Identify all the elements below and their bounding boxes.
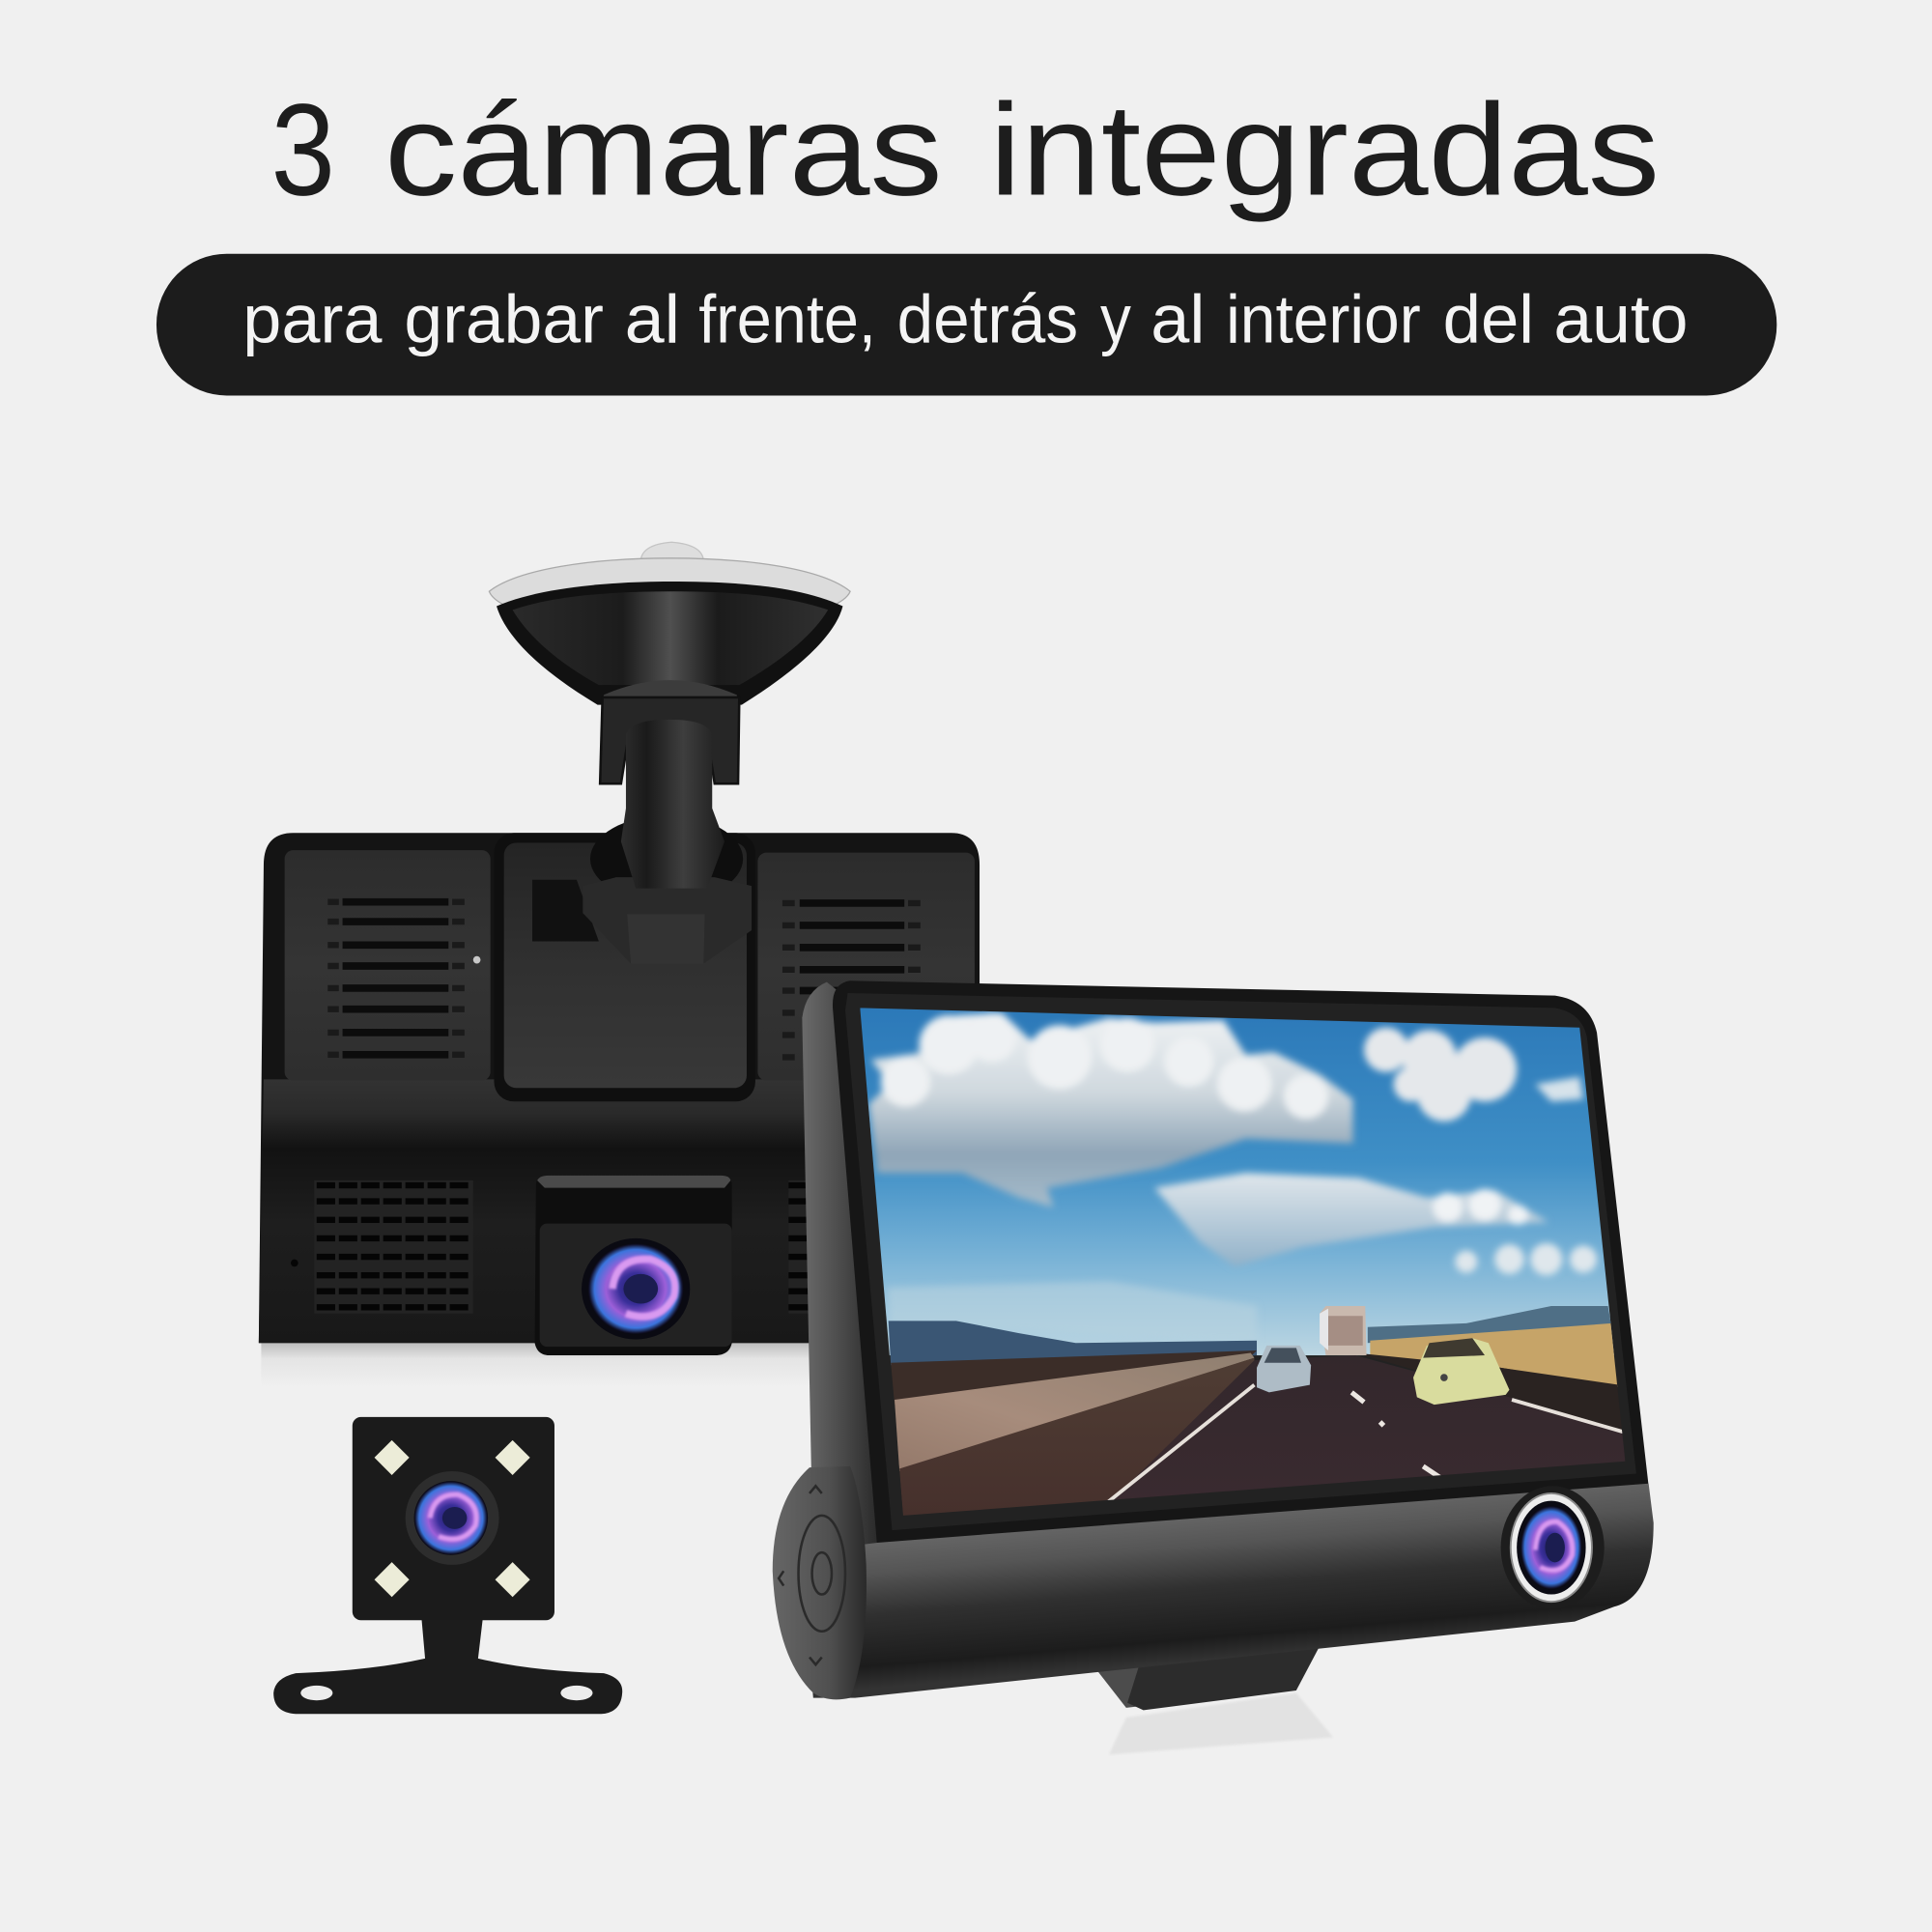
left back panel <box>285 850 491 1081</box>
subtitle text: para <box>242 281 383 357</box>
far left strip <box>891 1350 1257 1405</box>
lower back body <box>259 1079 980 1343</box>
screen <box>850 1005 1638 1518</box>
mount arm <box>621 720 724 889</box>
front lens <box>1501 1486 1605 1609</box>
subtitle text <box>242 281 1688 357</box>
centre mount plate <box>494 833 755 1101</box>
side clip <box>532 880 599 941</box>
title: integradas <box>989 77 1660 223</box>
rear view of dash camera with suction mount <box>259 542 980 1387</box>
subtitle text: auto <box>1553 281 1688 357</box>
suction cup <box>489 542 850 707</box>
subtitle text: al <box>625 281 680 357</box>
subtitle text: al <box>1151 281 1205 357</box>
subtitle text: interior <box>1226 281 1421 357</box>
indicator <box>473 956 480 963</box>
right back panel <box>757 853 975 1081</box>
lens <box>406 1471 499 1565</box>
monitor dash camera front view <box>773 980 1654 1754</box>
hex nut <box>582 877 752 963</box>
road <box>1104 1355 1627 1508</box>
lower grille left <box>314 1180 473 1314</box>
right mountains <box>1368 1306 1611 1343</box>
title: cámaras <box>384 77 943 223</box>
yellow car <box>1413 1338 1509 1405</box>
right road shoulder <box>1364 1354 1617 1387</box>
floor reflection <box>1109 1693 1333 1754</box>
subtitle text: frente, <box>698 281 876 357</box>
clouds <box>868 1012 1597 1343</box>
lower body bar <box>801 1484 1654 1698</box>
mount bracket <box>600 697 739 783</box>
truck <box>1320 1306 1367 1355</box>
lower grille right <box>788 1180 820 1314</box>
subtitle text: del <box>1443 281 1534 357</box>
left mountains <box>889 1321 1257 1365</box>
camera cube <box>353 1417 554 1620</box>
sky <box>850 1005 1638 1355</box>
road lines <box>1106 1385 1623 1503</box>
subtitle text: grabar <box>404 281 604 357</box>
LEDs <box>375 1440 530 1597</box>
left vents <box>327 902 465 1055</box>
title: 3 <box>271 77 335 223</box>
side button cap <box>773 1466 867 1699</box>
mounting plate <box>273 1616 622 1714</box>
title <box>271 77 1660 223</box>
desert right <box>1370 1323 1619 1387</box>
microphone <box>291 1260 298 1266</box>
floor reflection <box>261 1343 828 1387</box>
side strip <box>802 982 882 1565</box>
camera back housing <box>259 833 980 1343</box>
dark embankment <box>899 1358 1254 1518</box>
rear camera with LEDs <box>273 1417 622 1714</box>
silver car <box>1257 1346 1311 1392</box>
side buttons <box>779 1486 845 1664</box>
subtitle text: y <box>1100 281 1131 357</box>
front lens module <box>535 1176 732 1355</box>
mount ring <box>590 815 743 902</box>
subtitle pill <box>156 254 1776 395</box>
tan embankment <box>895 1353 1254 1471</box>
subtitle text: detrás <box>897 281 1078 357</box>
bottom mount <box>1095 1646 1320 1710</box>
screen bezel <box>833 980 1649 1548</box>
right vents <box>782 903 921 1057</box>
